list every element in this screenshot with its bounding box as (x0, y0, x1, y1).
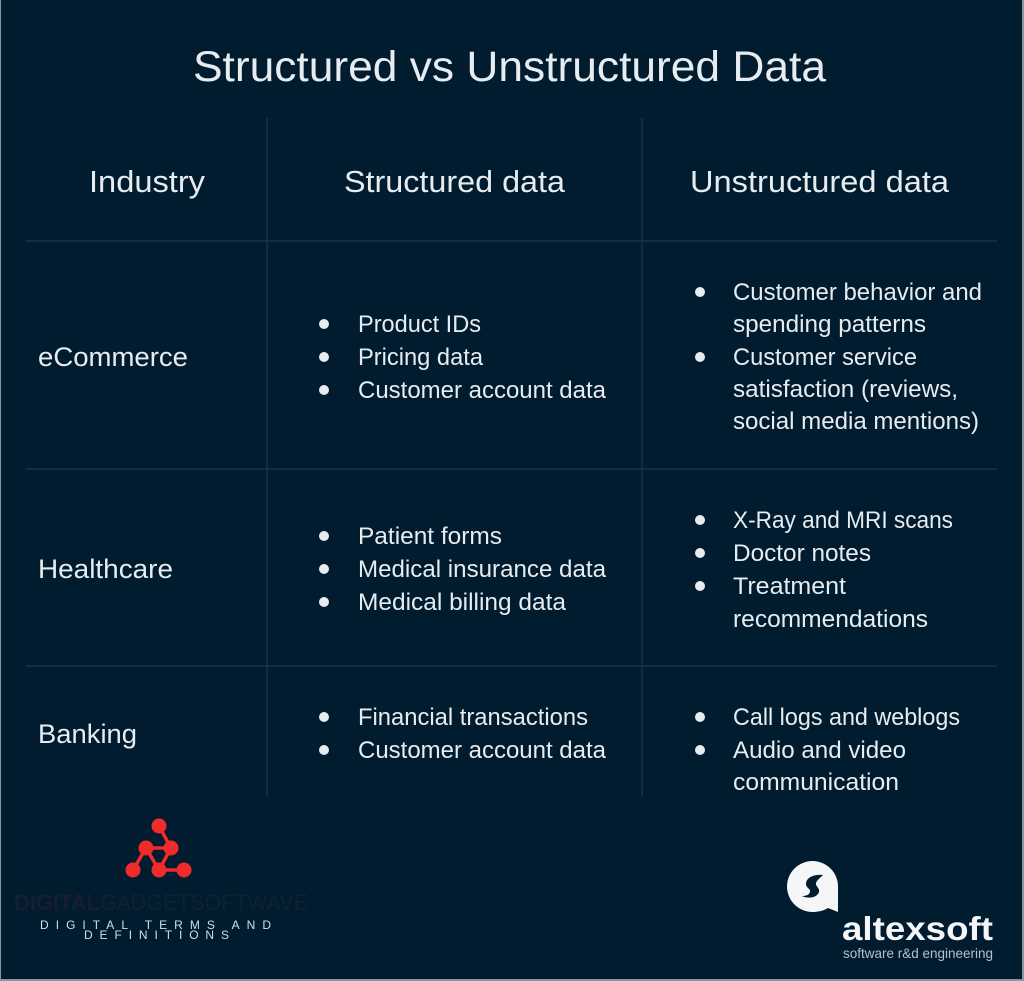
logo: altexsoft (787, 861, 993, 961)
row: Banking: communication (733, 769, 899, 796)
row: eCommerce: satisfaction (reviews, (733, 376, 958, 403)
row: eCommerce (38, 279, 982, 435)
wordmark: DIGITAL (14, 890, 100, 915)
wordmark: altexsoft (842, 910, 993, 947)
row: Banking: Customer account data (358, 737, 607, 764)
table header row: Structured data (344, 164, 566, 199)
row: Healthcare: Treatment (733, 573, 846, 600)
row: Healthcare: Medical billing data (358, 589, 567, 616)
tagline: software r&d engineering (843, 945, 993, 961)
row: Healthcare: Doctor notes (733, 540, 871, 567)
row: eCommerce: Customer behavior and (733, 279, 982, 306)
row: Banking: Banking (38, 719, 137, 749)
row: eCommerce: social media mentions) (733, 408, 979, 435)
row: Banking: Call logs and weblogs (733, 704, 960, 731)
row: eCommerce: Product IDs (358, 311, 481, 338)
icon: speech bubble (787, 861, 838, 912)
logo: Digital Gadget Wave: DEFINITIONS (84, 928, 229, 942)
table header row: Industry (89, 164, 206, 199)
row: eCommerce: Customer account data (358, 377, 607, 404)
title: Structured vs Unstructured Data (193, 43, 826, 91)
row: Healthcare: recommendations (733, 606, 928, 633)
row: Healthcare: Healthcare (38, 554, 173, 584)
tagline: DIGITAL TERMS AND (40, 918, 271, 932)
row: Banking: Financial transactions (358, 704, 588, 731)
row: Healthcare: X-Ray and MRI scans (733, 507, 953, 534)
row: eCommerce: eCommerce (38, 342, 188, 372)
row: eCommerce: spending patterns (733, 311, 926, 338)
row: Healthcare (38, 507, 953, 633)
row: Banking: Audio and video (733, 737, 906, 764)
row: eCommerce: Pricing data (358, 344, 484, 371)
logo: Digital Gadget Wave (14, 818, 308, 942)
row: Healthcare: Patient forms (358, 523, 502, 550)
table header row: Unstructured data (690, 164, 950, 199)
row: eCommerce: Customer service (733, 344, 917, 371)
row: Banking (38, 704, 960, 796)
logo: Digital Gadget Wave: GADGETSOFTWAVE (100, 890, 308, 915)
icon: red network (126, 818, 192, 878)
row: Healthcare: Medical insurance data (358, 556, 607, 583)
table header row (89, 164, 950, 199)
